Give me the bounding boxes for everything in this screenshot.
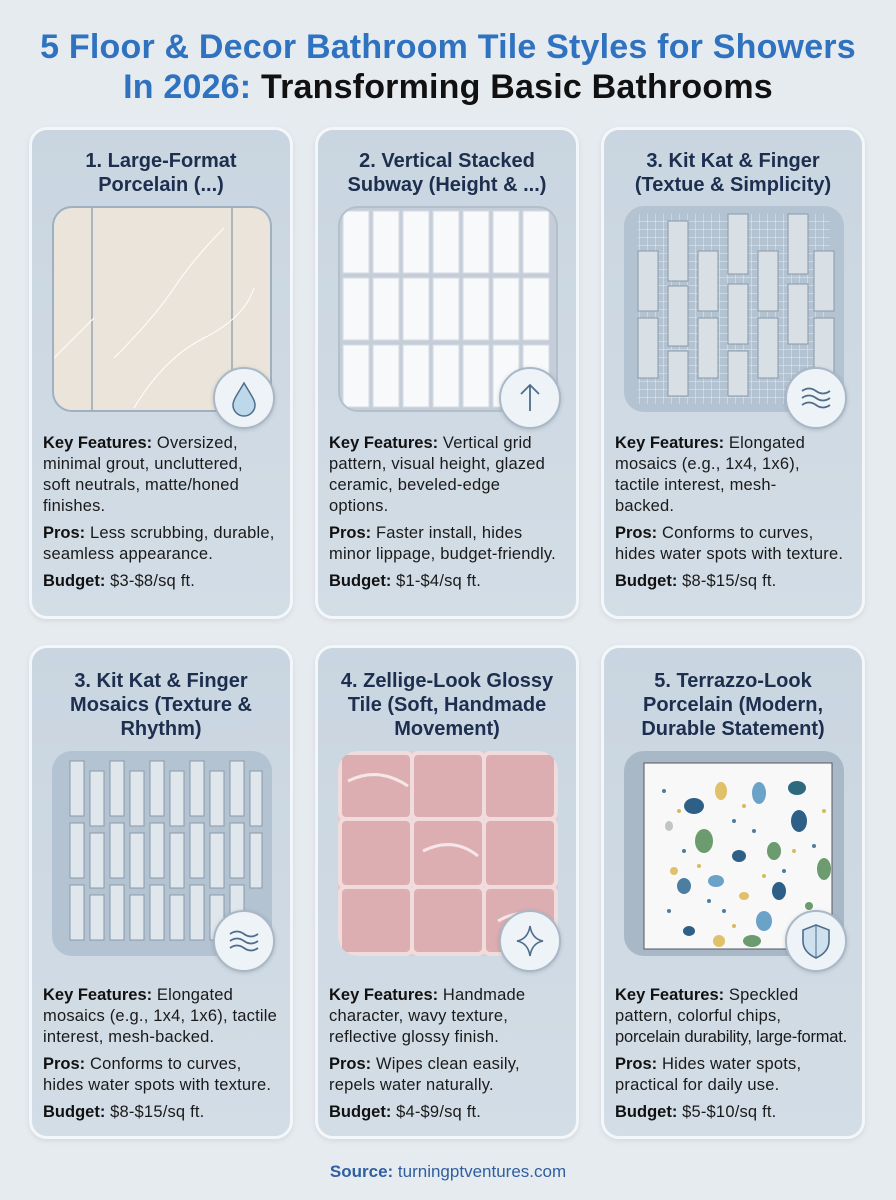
text block 3: Pros: Conforms to curves, xyxy=(615,524,813,542)
text block 3: hides water spots with texture. xyxy=(615,545,843,563)
text block 4: Key Features: Elongated xyxy=(43,986,233,1004)
tile image: zellige xyxy=(338,751,558,956)
heading 3: 3. Kit Kat & Finger xyxy=(646,150,820,172)
text block 6: practical for daily use. xyxy=(615,1076,779,1094)
text block 3: tactile interest, mesh- xyxy=(615,476,776,494)
text block 2: minor lippage, budget-friendly. xyxy=(329,545,556,563)
text block 6 xyxy=(615,986,847,1121)
panel: card 6 xyxy=(601,645,865,1139)
heading 5: Tile (Soft, Handmade xyxy=(348,694,546,716)
title: 5 Floor & Decor Bathroom Tile Styles for Showers xyxy=(40,28,856,66)
text block 2: Key Features: Vertical grid xyxy=(329,434,532,452)
title xyxy=(40,28,856,106)
heading 4: Mosaics (Texture & xyxy=(70,694,252,716)
tile image: finger mosaic xyxy=(624,206,844,412)
text block 3: backed. xyxy=(615,497,674,515)
heading 4: 3. Kit Kat & Finger xyxy=(74,670,248,692)
text block 4: Budget: $8-$15/sq ft. xyxy=(43,1103,204,1121)
text block 3: mosaics (e.g., 1x4, 1x6), xyxy=(615,455,800,473)
text block 2: options. xyxy=(329,497,388,515)
text block 4 xyxy=(43,986,277,1121)
text block 1: Pros: Less scrubbing, durable, xyxy=(43,524,275,542)
text block 1: seamless appearance. xyxy=(43,545,213,563)
text block 1: minimal grout, uncluttered, xyxy=(43,455,243,473)
heading 6: 5. Terrazzo-Look xyxy=(654,670,812,692)
heading 4 xyxy=(70,670,252,740)
panel: card 5 xyxy=(315,645,579,1139)
icon: sparkle xyxy=(499,910,561,972)
text block 2: ceramic, beveled-edge xyxy=(329,476,500,494)
text block 3 xyxy=(615,434,843,590)
text block 6: Key Features: Speckled xyxy=(615,986,798,1004)
icon: water drop xyxy=(213,367,275,429)
text block 3: Budget: $8-$15/sq ft. xyxy=(615,572,776,590)
panel: card 2 xyxy=(315,127,579,619)
text block 6: Budget: $5-$10/sq ft. xyxy=(615,1103,776,1121)
text block 4: hides water spots with texture. xyxy=(43,1076,271,1094)
text block 4: interest, mesh-backed. xyxy=(43,1028,214,1046)
panel: card 1 xyxy=(29,127,293,619)
heading 1: Porcelain (...) xyxy=(98,174,224,196)
heading 6: Durable Statement) xyxy=(641,718,825,740)
text block 6: porcelain durability, large-format. xyxy=(615,1028,847,1046)
heading 1: 1. Large-Format xyxy=(85,150,237,172)
heading 4: Rhythm) xyxy=(120,718,202,740)
icon: waves xyxy=(785,367,847,429)
heading 3: (Textue & Simplicity) xyxy=(635,174,831,196)
text block 5: repels water naturally. xyxy=(329,1076,494,1094)
panel: card 4 xyxy=(29,645,293,1139)
text block 5: reflective glossy finish. xyxy=(329,1028,499,1046)
text block 1: finishes. xyxy=(43,497,105,515)
panel: card 3 xyxy=(601,127,865,619)
heading 2 xyxy=(348,150,546,196)
text block 1 xyxy=(43,434,275,590)
text block 2 xyxy=(329,434,556,590)
tile image: porcelain xyxy=(52,206,272,412)
heading 2: 2. Vertical Stacked xyxy=(359,150,535,172)
heading 6 xyxy=(641,670,825,740)
tile image: subway xyxy=(338,206,558,412)
text block 6: Pros: Hides water spots, xyxy=(615,1055,801,1073)
source footer: Source: turningptventures.com xyxy=(330,1162,566,1181)
tile image: finger mosaic 2 xyxy=(52,751,272,956)
text block 1: soft neutrals, matte/honed xyxy=(43,476,239,494)
icon: arrow up xyxy=(499,367,561,429)
text block 2: Budget: $1-$4/sq ft. xyxy=(329,572,481,590)
text block 5: character, wavy texture, xyxy=(329,1007,508,1025)
text block 2: pattern, visual height, glazed xyxy=(329,455,545,473)
heading 1 xyxy=(85,150,237,196)
text block 1: Budget: $3-$8/sq ft. xyxy=(43,572,195,590)
text block 1: Key Features: Oversized, xyxy=(43,434,238,452)
title: In 2026: Transforming Basic Bathrooms xyxy=(123,68,773,106)
text block 5: Pros: Wipes clean easily, xyxy=(329,1055,520,1073)
text block 2: Pros: Faster install, hides xyxy=(329,524,522,542)
icon: waves xyxy=(213,910,275,972)
text block 5: Budget: $4-$9/sq ft. xyxy=(329,1103,481,1121)
text block 4: mosaics (e.g., 1x4, 1x6), tactile xyxy=(43,1007,277,1025)
text block 4: Pros: Conforms to curves, xyxy=(43,1055,241,1073)
text block 5: Key Features: Handmade xyxy=(329,986,525,1004)
icon: shield xyxy=(785,910,847,972)
tile image: terrazzo xyxy=(624,751,844,956)
heading 5: 4. Zellige-Look Glossy xyxy=(341,670,553,692)
heading 5 xyxy=(341,670,553,740)
heading 3 xyxy=(635,150,831,196)
heading 2: Subway (Height & ...) xyxy=(348,174,546,196)
text block 5 xyxy=(329,986,525,1121)
text block 6: pattern, colorful chips, xyxy=(615,1007,781,1025)
heading 5: Movement) xyxy=(394,718,500,740)
text block 3: Key Features: Elongated xyxy=(615,434,805,452)
heading 6: Porcelain (Modern, xyxy=(643,694,823,716)
